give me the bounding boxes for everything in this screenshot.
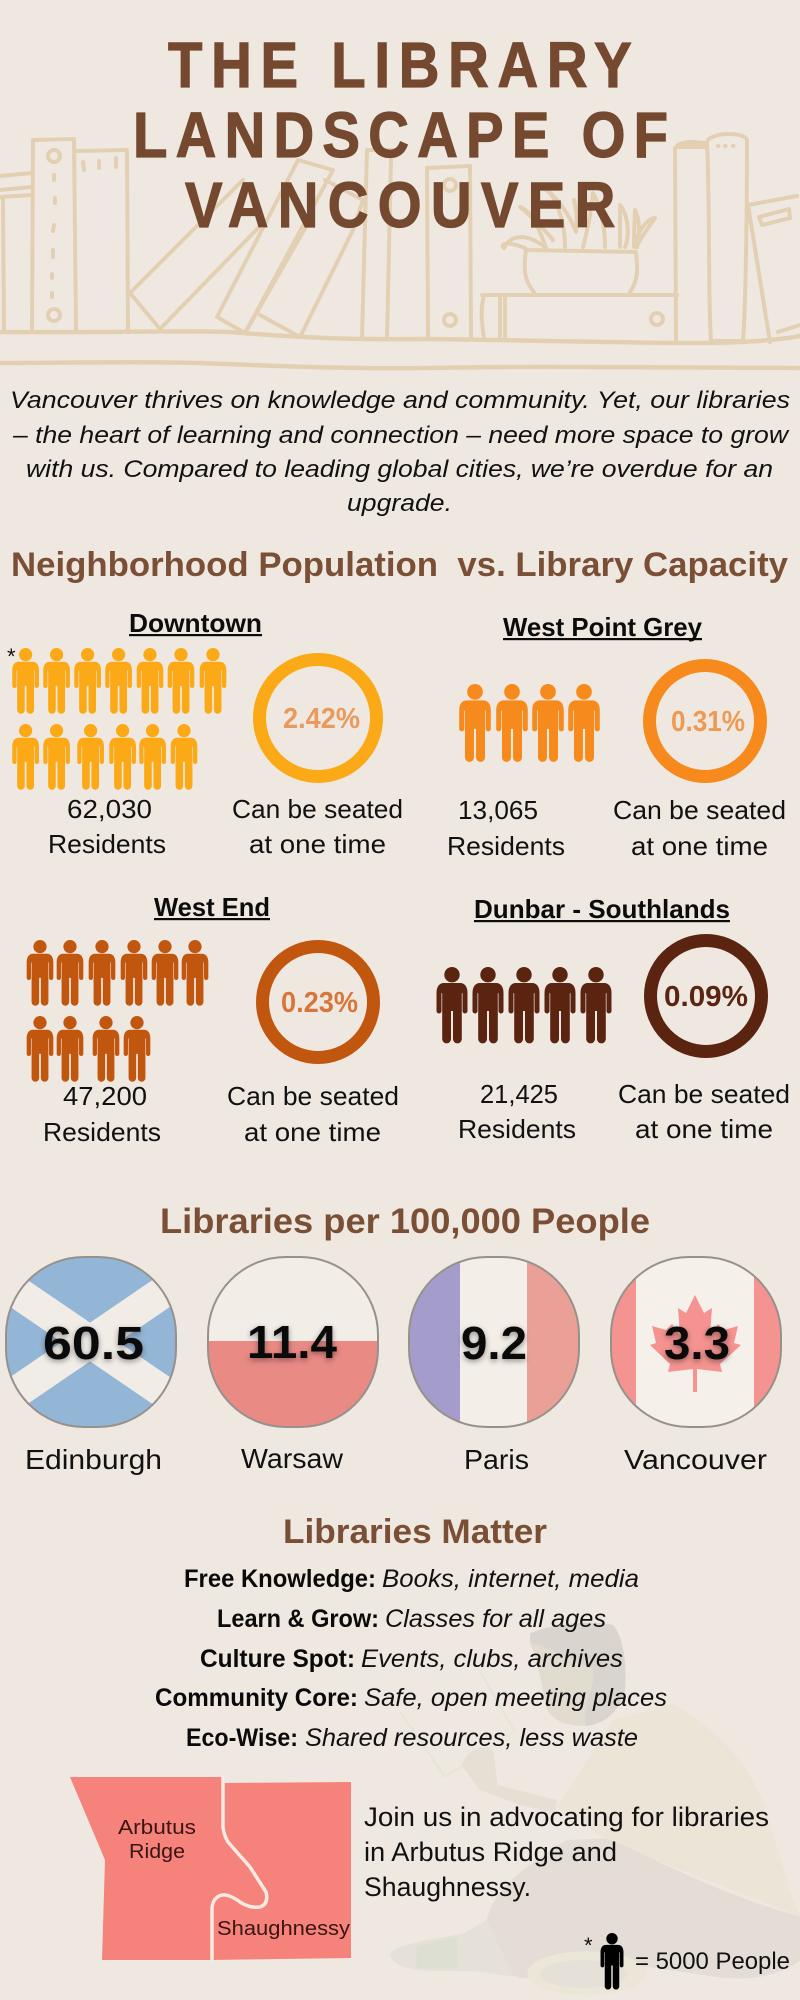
title xyxy=(133,29,668,241)
asterisk: * xyxy=(7,644,16,669)
call to action xyxy=(364,1802,769,1902)
residents label: 21,425 xyxy=(480,1079,558,1109)
seating label xyxy=(227,1081,399,1147)
person icons xyxy=(27,940,208,1082)
seating label: at one time xyxy=(244,1117,381,1147)
intro paragraph: upgrade. xyxy=(347,490,452,517)
label: Arbutus Ridge: Ridge xyxy=(129,1841,185,1863)
district name: West Point Grey xyxy=(503,612,703,642)
seating label xyxy=(613,795,786,861)
label: Arbutus Ridge: Arbutus xyxy=(118,1817,196,1839)
panel: Paris flag badge xyxy=(409,1257,579,1475)
call to action: Shaughnessy. xyxy=(364,1872,531,1902)
residents label: Residents xyxy=(458,1114,576,1144)
seating label xyxy=(232,794,403,859)
heading: libraries per 100,000 people: Libraries per 100,000 People xyxy=(160,1202,650,1241)
title: LANDSCAPE OF xyxy=(133,99,668,171)
seating label: Can be seated xyxy=(613,795,786,825)
person icons xyxy=(459,684,600,762)
map: Arbutus Ridge and Shaughnessy xyxy=(70,1775,351,1962)
residents label xyxy=(43,1081,161,1147)
heading: libraries matter: Libraries Matter xyxy=(283,1513,547,1551)
ring: 0.31%: 0.31% xyxy=(671,706,745,738)
residents label xyxy=(447,795,565,861)
panel: Downtown xyxy=(7,608,403,859)
residents label: Residents xyxy=(48,829,166,859)
intro paragraph xyxy=(10,387,790,517)
list: why libraries matter: Learn & Grow: xyxy=(217,1605,379,1633)
ring: 0.31% xyxy=(650,666,760,776)
ring: 0.23%: 0.23% xyxy=(281,987,358,1019)
list: why libraries matter: Culture Spot: xyxy=(200,1645,355,1673)
list: why libraries matter: Events, clubs, archives xyxy=(361,1645,623,1673)
list: why libraries matter: Safe, open meeting places xyxy=(364,1684,667,1712)
district name: Dunbar - Southlands xyxy=(474,894,730,924)
ring: 0.09%: 0.09% xyxy=(664,981,748,1013)
panel: West Point Grey xyxy=(447,612,786,861)
list: why libraries matter: Community Core: xyxy=(155,1684,358,1712)
list: why libraries matter: Eco-Wise: xyxy=(186,1724,298,1752)
panel: Vancouver flag badge xyxy=(611,1257,781,1475)
legend: person equals 5000 people: * xyxy=(584,1933,593,1958)
label: Shaughnessy: Shaughnessy xyxy=(217,1918,350,1940)
intro paragraph: – the heart of learning and connection – need more space to grow xyxy=(12,422,790,449)
list: why libraries matter xyxy=(155,1565,667,1752)
list: why libraries matter: Shared resources, less waste xyxy=(305,1724,638,1752)
seating label: at one time xyxy=(249,829,386,859)
seating label: at one time xyxy=(631,831,768,861)
panel: Dunbar - Southlands xyxy=(436,894,790,1144)
illustration: bookshelf xyxy=(0,134,800,368)
residents label: 47,200 xyxy=(63,1081,147,1111)
seating label: at one time xyxy=(635,1114,773,1144)
ring: 0.09% xyxy=(650,940,762,1052)
ring: 2.42%: 2.42% xyxy=(283,703,360,735)
title: THE LIBRARY xyxy=(168,29,632,101)
residents label: 62,030 xyxy=(67,794,152,824)
city label: Warsaw xyxy=(241,1443,344,1474)
label: Arbutus Ridge xyxy=(118,1817,196,1863)
residents label: Residents xyxy=(447,831,565,861)
value: 3.3 xyxy=(664,1317,730,1369)
call to action: in Arbutus Ridge and xyxy=(364,1837,617,1867)
residents label: Residents xyxy=(43,1117,161,1147)
person icons xyxy=(12,648,226,790)
seating label: Can be seated xyxy=(227,1081,399,1111)
call to action: Join us in advocating for libraries xyxy=(364,1802,769,1832)
district name: Downtown xyxy=(129,608,262,638)
ring: 2.42% xyxy=(260,660,376,776)
list: why libraries matter: Books, internet, media xyxy=(382,1565,639,1593)
seating label: Can be seated xyxy=(232,794,403,824)
panel: Edinburgh flag badge xyxy=(5,1256,177,1475)
city label: Vancouver xyxy=(624,1444,767,1475)
value: 9.2 xyxy=(461,1317,527,1369)
panel: Warsaw flag badge xyxy=(208,1257,378,1474)
title: VANCOUVER xyxy=(185,169,615,241)
city label: Edinburgh xyxy=(25,1444,162,1475)
panel: West End xyxy=(27,892,399,1147)
list: why libraries matter: Classes for all ages xyxy=(385,1605,606,1633)
residents label: 13,065 xyxy=(458,795,538,825)
city label: Paris xyxy=(464,1444,529,1475)
ring: 0.23% xyxy=(262,946,374,1058)
legend: person equals 5000 people xyxy=(584,1933,790,1990)
legend: person equals 5000 people: = 5000 People xyxy=(635,1948,790,1975)
residents label xyxy=(458,1079,576,1144)
district name: West End xyxy=(154,892,270,922)
value: 60.5 xyxy=(43,1317,144,1369)
seating label: Can be seated xyxy=(618,1079,790,1109)
list: why libraries matter: Free Knowledge: xyxy=(184,1565,376,1593)
heading: neighborhood population vs library capacity: Neighborhood Population vs. Library Capacity xyxy=(11,546,788,584)
person icons xyxy=(436,967,612,1043)
background illustration: person reading xyxy=(390,1623,800,1995)
seating label xyxy=(618,1079,790,1144)
intro paragraph: Vancouver thrives on knowledge and community. Yet, our libraries xyxy=(10,387,790,414)
intro paragraph: with us. Compared to leading global cities, we’re overdue for an xyxy=(26,456,773,483)
value: 11.4 xyxy=(247,1316,337,1368)
residents label xyxy=(48,794,166,859)
